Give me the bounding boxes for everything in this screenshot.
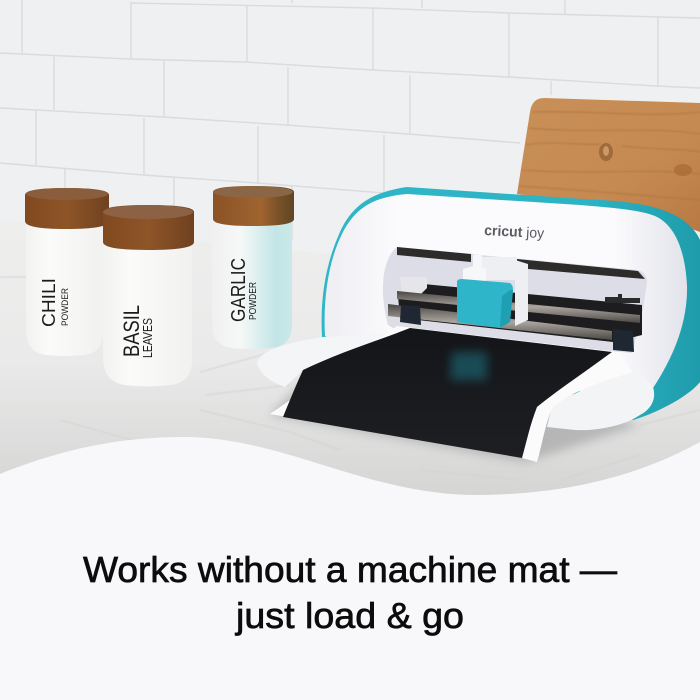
machine: teal reflection (450, 352, 487, 380)
machine: teal shell (322, 187, 700, 420)
machine: cutting head (480, 257, 528, 326)
marble counter (0, 220, 700, 700)
machine: right tray (547, 365, 654, 430)
headline: Works without a machine mat — (83, 549, 617, 590)
jar: chili powder: POWDER (60, 288, 71, 326)
jar: chili powder (25, 188, 109, 356)
white curved panel (0, 437, 700, 700)
background: tiled wall (0, 0, 700, 270)
jar: basil leaves (103, 205, 194, 386)
machine: roller clips (400, 305, 421, 325)
machine: rear dark slot (397, 247, 645, 279)
jar: garlic powder: POWDER (247, 282, 259, 320)
cricut joy machine (257, 187, 700, 462)
machine: lower rail (388, 304, 612, 340)
machine: left tray (257, 333, 395, 387)
headline (83, 549, 617, 636)
machine: white vinyl backing (270, 326, 633, 462)
machine: ground shadow (270, 385, 640, 462)
machine: black vinyl sheet (283, 328, 612, 458)
jar: basil leaves: BASIL (119, 305, 144, 357)
machine: logo: cricut joy (484, 223, 545, 242)
headline: just load & go (235, 595, 464, 636)
jar: chili powder: CHILI (38, 278, 59, 327)
machine: dark interior (398, 283, 642, 342)
machine: white front (325, 194, 687, 395)
machine: upper rail (397, 291, 640, 323)
machine: side brackets (400, 277, 427, 295)
machine: cavity (383, 247, 647, 353)
cutting board (517, 98, 700, 232)
jar: basil leaves: LEAVES (140, 318, 155, 358)
jar: garlic powder (212, 186, 294, 349)
jar: garlic powder: GARLIC (227, 258, 250, 322)
